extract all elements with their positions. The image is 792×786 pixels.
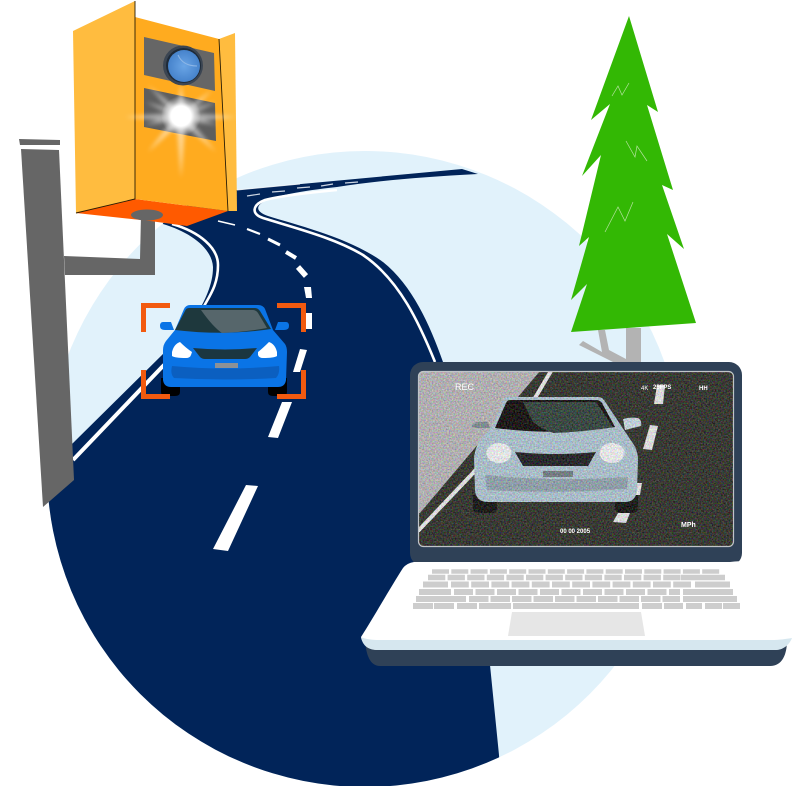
camera side face (73, 1, 135, 213)
screen (418, 371, 734, 547)
mount flange (131, 210, 163, 220)
keyboard (413, 572, 740, 606)
format label: 4K (641, 386, 648, 392)
mirrors (160, 322, 289, 330)
detection brackets (141, 303, 306, 399)
roadside (418, 371, 540, 513)
date label: 00 00 2005 (560, 529, 591, 535)
laptop lid (410, 362, 742, 566)
number plate (215, 363, 238, 368)
windshield (175, 308, 271, 333)
laptop base shadow (365, 640, 787, 666)
tree (571, 16, 696, 363)
road line (418, 371, 551, 531)
foliage highlights (605, 83, 647, 232)
road dashes (613, 385, 665, 523)
grille (193, 348, 257, 359)
camera underside (76, 199, 228, 226)
rec label: REC (455, 382, 475, 392)
deck edge (361, 637, 792, 650)
camera pole (19, 139, 155, 507)
car body (163, 305, 287, 387)
road (0, 169, 501, 786)
windshield highlight (201, 310, 267, 333)
lens window (144, 37, 215, 91)
status label: HH (699, 386, 708, 392)
flash (125, 84, 236, 178)
wheels (161, 378, 287, 396)
laptop (361, 362, 792, 666)
screen border (418, 372, 734, 546)
car (160, 305, 289, 396)
foliage (571, 16, 696, 332)
flash window (144, 88, 216, 141)
fps label: 25FPS (653, 385, 671, 391)
screen car (472, 397, 641, 513)
speed camera (73, 1, 237, 226)
lens (163, 46, 203, 86)
lower band (171, 366, 279, 380)
keyboard deck (361, 561, 792, 650)
trackpad (508, 612, 645, 636)
background circle (47, 151, 683, 786)
speed label: MPh (681, 522, 696, 529)
camera right strip (219, 33, 237, 211)
camera front face (135, 17, 228, 211)
trunk (579, 328, 641, 363)
headlights (172, 342, 277, 358)
